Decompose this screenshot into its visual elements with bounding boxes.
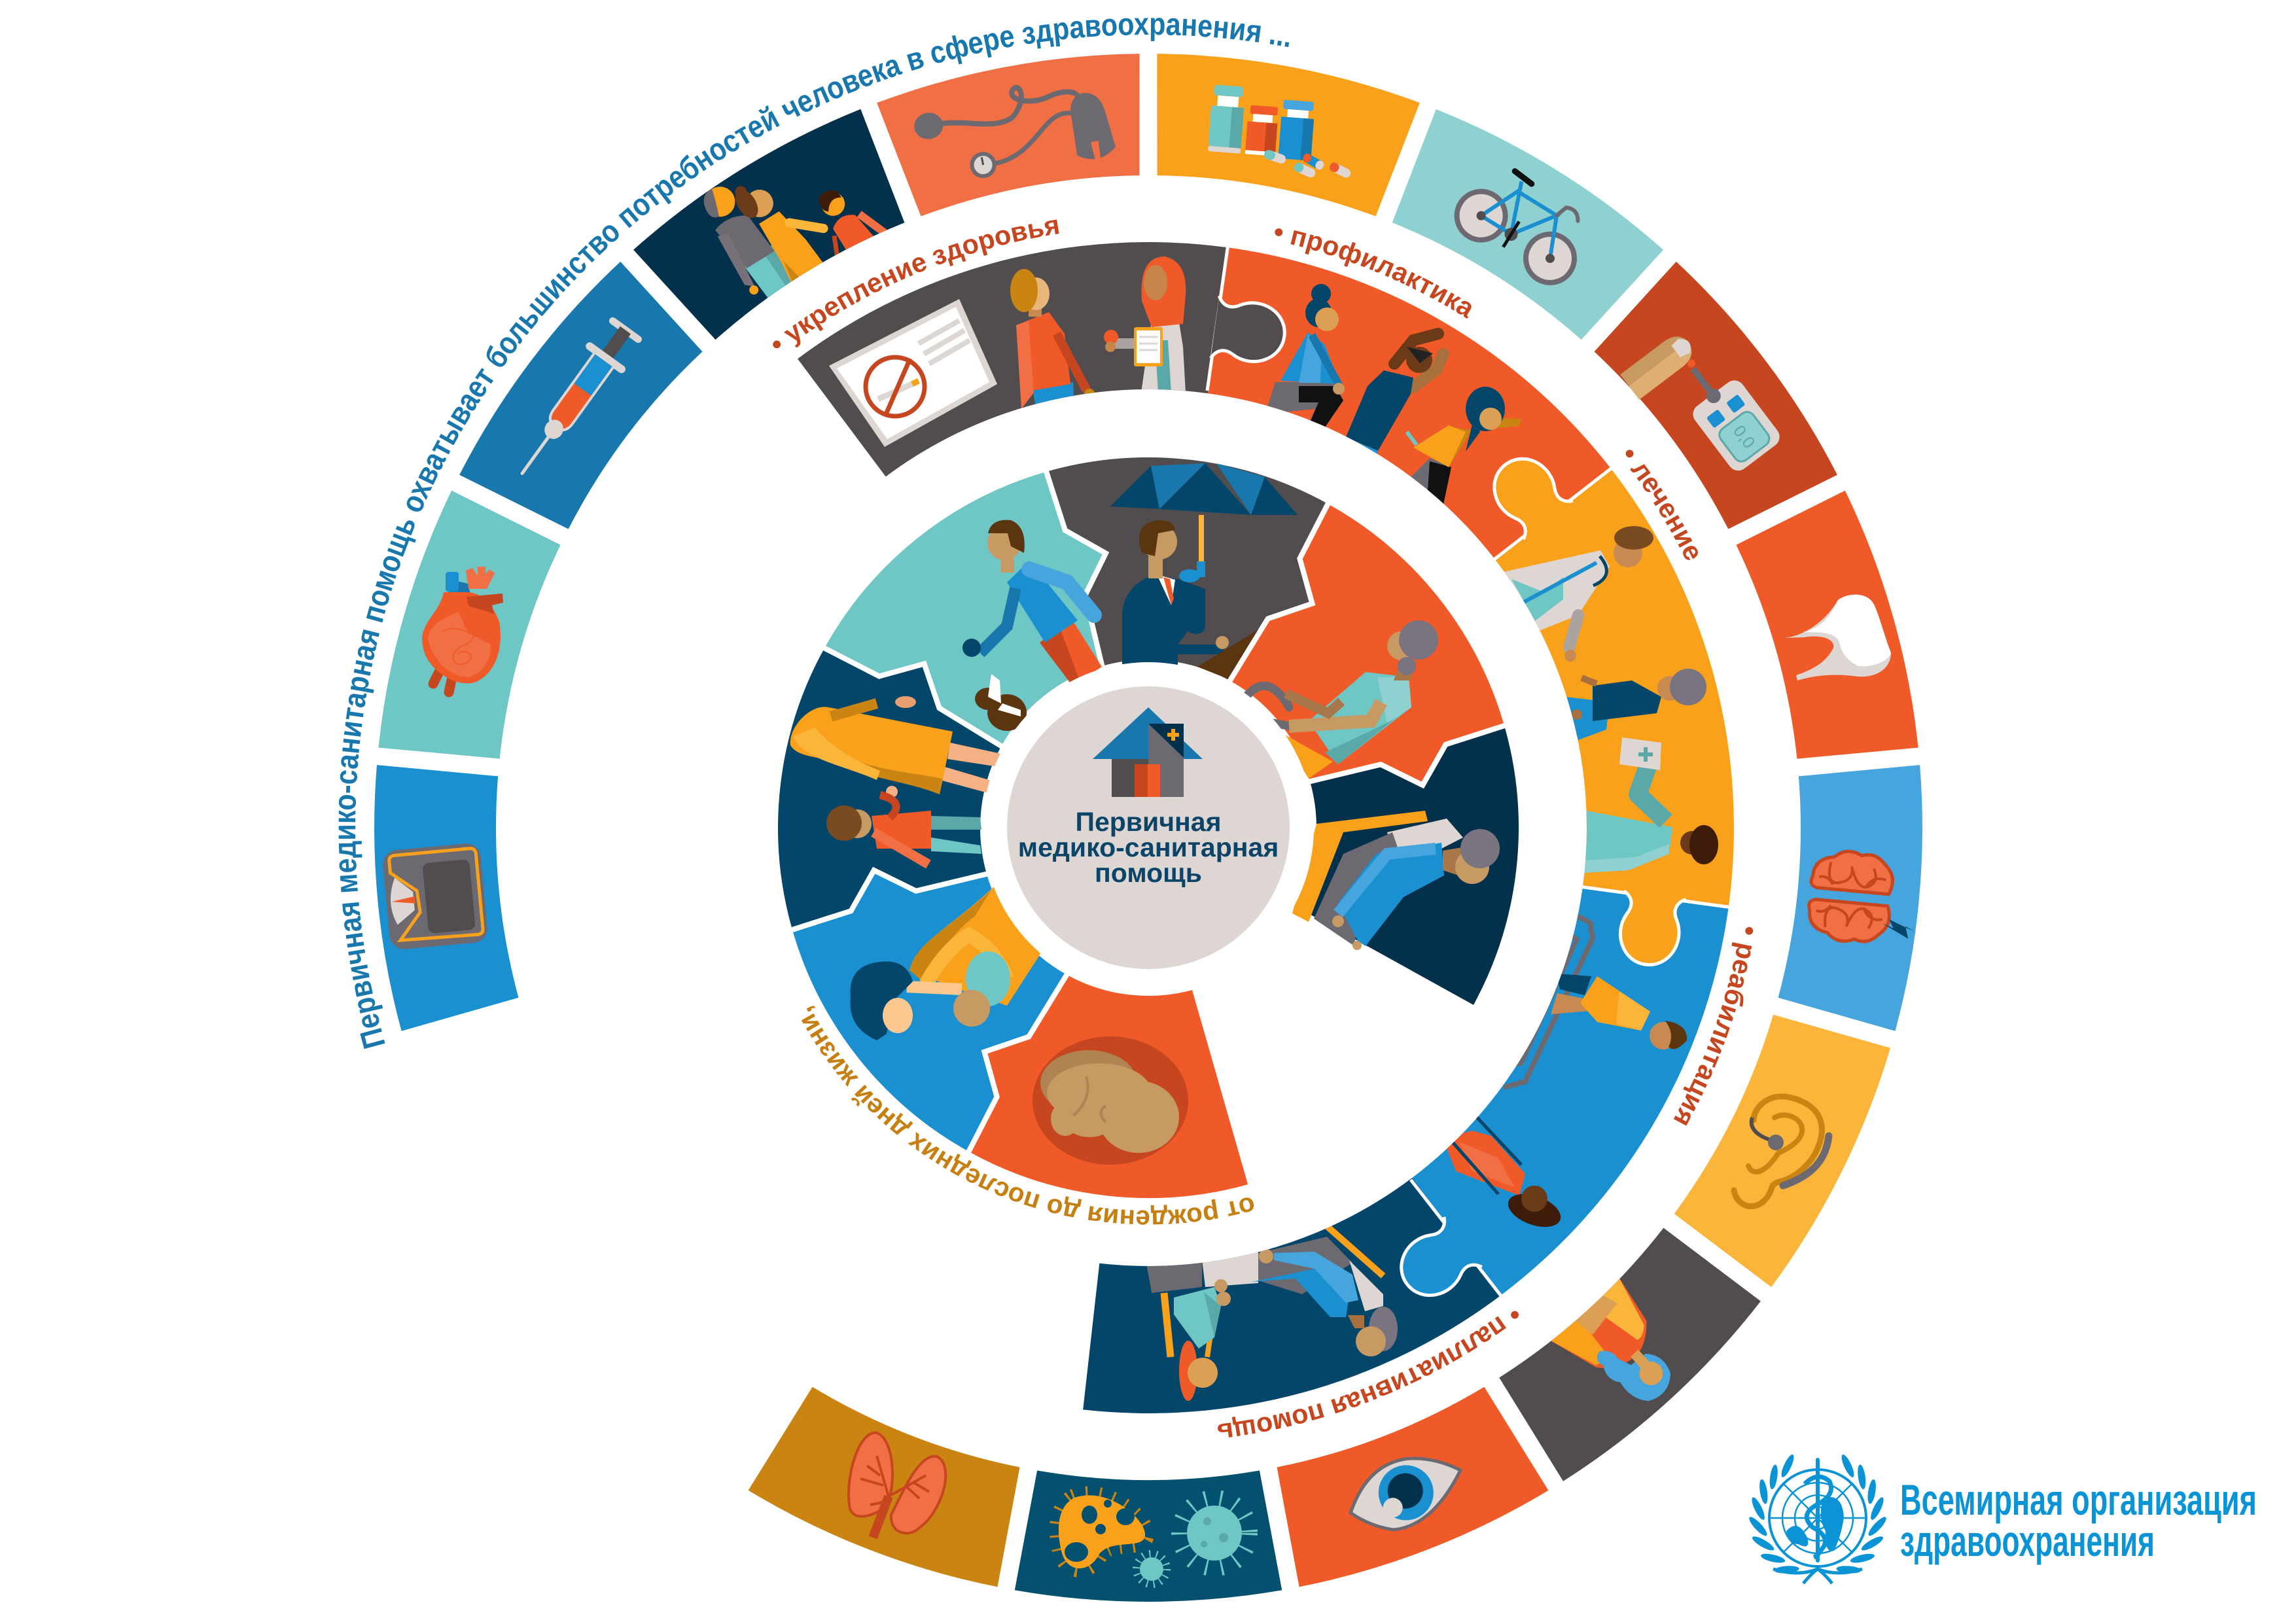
segment: medicines (1135, 43, 1422, 221)
middle ring: service jigsaw (798, 242, 1734, 1413)
icon: glucose meter: 0,0 (1729, 421, 1759, 452)
line between treatment and prevention (1492, 467, 1614, 561)
centre badge: primary health care (1007, 686, 1290, 969)
wedge: infancy (793, 874, 1069, 1153)
icon: ear with hearing aid (1734, 1097, 1829, 1207)
piece: rehabilitation (1388, 887, 1729, 1309)
segment: neurology (1776, 754, 1932, 1032)
icon: person in yellow shawl (1551, 1279, 1671, 1402)
figure: elderly woman with walker (1246, 620, 1438, 779)
logo text: здравоохранения (1900, 1517, 2155, 1565)
centre title: Первичная (1075, 807, 1222, 837)
icon: pill bottles (1207, 84, 1358, 182)
label: health promotion: • укрепление здоровья (773, 220, 1059, 348)
icon: syringe (506, 319, 641, 485)
segment: hearing (1664, 995, 1901, 1292)
line between treatment and rehabilitation (1580, 887, 1732, 908)
scene: doctor and patients (1504, 526, 1718, 873)
piece: treatment (1481, 446, 1734, 969)
segment: eye care (1256, 1379, 1553, 1598)
centre title: медико-санитарная (1018, 832, 1279, 862)
label: treatment: • лечение (1625, 450, 1698, 560)
icon: brain (1806, 848, 1921, 947)
figure: elderly person in armchair (1292, 811, 1500, 950)
outer ring: health needs (365, 43, 1932, 1602)
icon: heart (422, 567, 503, 692)
icon: bicycle (1448, 156, 1600, 292)
icon: blood pressure cuff (910, 71, 1118, 193)
piece: palliative care (1083, 1178, 1501, 1413)
icon: WHO emblem (1747, 1453, 1888, 1583)
wedge: working adult (1049, 457, 1326, 679)
figure: mother with baby (851, 887, 1040, 1040)
segment: respiratory (744, 1379, 1040, 1598)
icon: house with cross (1093, 707, 1203, 797)
logo: World Health Organization (1747, 1453, 2257, 1583)
icon: microbes (1059, 1495, 1248, 1583)
line between rehabilitation and palliative (1411, 1180, 1502, 1297)
label: palliative care: • паллиативная помощь (1218, 1311, 1519, 1438)
icon: tooth (1784, 595, 1891, 680)
scene: walker and crutches (1443, 916, 1687, 1233)
headline curved around outer ring: Первичная медико-санитарная помощь охватывает большинство потребностей человека в сфере здравоохранения ... (339, 18, 1289, 1050)
label: rehabilitation: • реабилитация (1674, 927, 1754, 1125)
tab: rehabilitation jigsaw (1388, 1217, 1482, 1309)
segment: blood pressure (875, 43, 1161, 221)
segment: community member (1499, 1227, 1761, 1481)
segment: diabetes (1581, 255, 1846, 547)
figure: boy with ball and dog (963, 520, 1102, 731)
wedge: adolescence (804, 447, 1165, 797)
scene: no smoking board and doctor (829, 256, 1186, 447)
wedge: older walker (1227, 503, 1504, 781)
figure: mother and child (790, 696, 1001, 864)
piece: health promotion (798, 242, 1288, 476)
segment: immunization (450, 255, 716, 547)
icon: bathroom scale (381, 842, 489, 951)
inner ring: stages of life (762, 441, 1535, 1214)
segment: infectious disease (1015, 1470, 1282, 1602)
wedge: childhood (777, 650, 1000, 932)
icon: lungs (849, 1433, 945, 1538)
figure: man with umbrella (1110, 463, 1298, 680)
centre title: помощь (1095, 858, 1202, 888)
tab: treatment jigsaw to prevention (1481, 446, 1573, 539)
icon: eye (1339, 1441, 1473, 1544)
piece: disease prevention (1208, 247, 1611, 559)
icon: glucose meter (1620, 319, 1784, 494)
tab: treatment jigsaw to rehabilitation (1614, 891, 1686, 969)
segment: physical activity (1373, 99, 1669, 351)
scene: seated patient and carer (1146, 1226, 1398, 1401)
line between promotion and prevention (1207, 244, 1228, 391)
wedge: before birth (971, 976, 1248, 1198)
icon: three people (704, 186, 887, 298)
segment: weight (365, 754, 521, 1032)
segment: dental (1730, 487, 1930, 781)
label: from birth to the last days of life: от рождения до последних дней жизни, (801, 1006, 1254, 1225)
segment: family health (633, 109, 904, 340)
tab: promotion jigsaw (1210, 296, 1288, 368)
wedge: older adult seated (1292, 723, 1519, 1005)
figure: fetus in womb (1033, 1036, 1188, 1165)
segment: cardiovascular (367, 487, 567, 781)
scene: exercising people (1267, 284, 1521, 517)
label: prevention: • профилактика (1275, 228, 1472, 319)
